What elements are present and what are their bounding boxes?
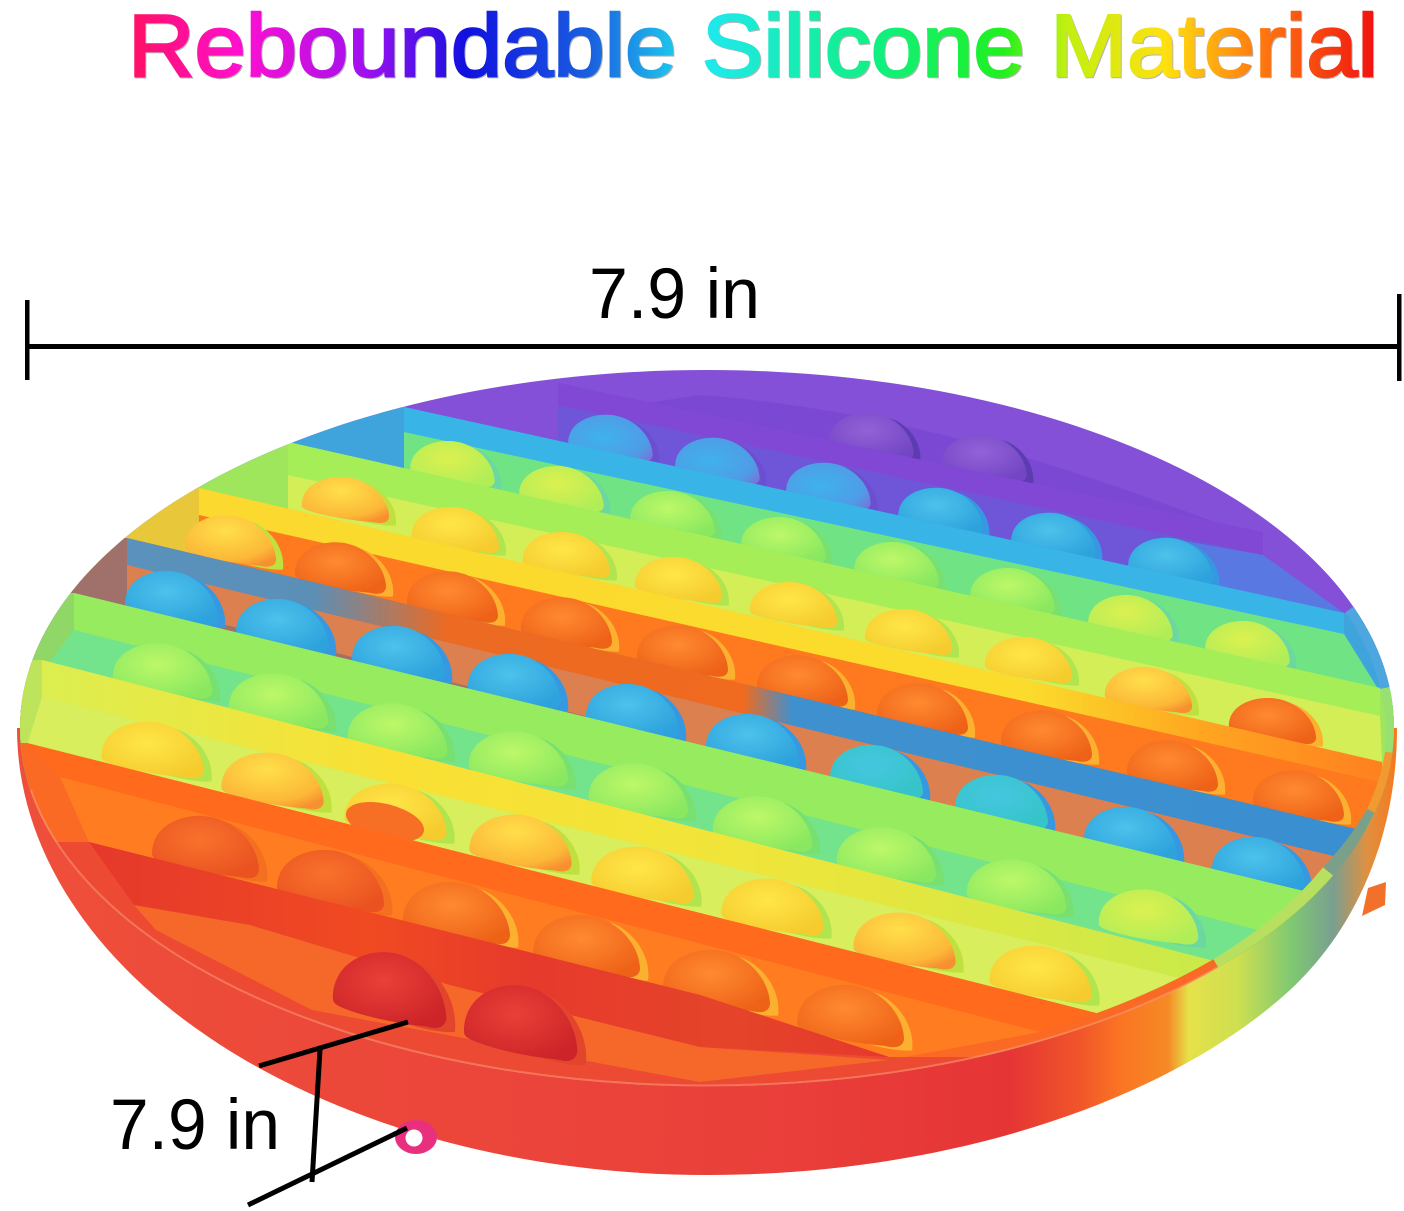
width label: 7.9 in [589, 255, 760, 334]
purple-blue row [558, 405, 1344, 613]
width dimension marker [25, 255, 1402, 381]
red section [56, 842, 978, 1086]
purple wall [558, 383, 1263, 555]
blue wall section [20, 538, 1366, 966]
blue section [20, 407, 1394, 966]
green section [20, 442, 1394, 842]
orange section [20, 743, 1122, 1086]
right rim tab [1362, 882, 1386, 916]
outer side rim [17, 728, 1397, 1175]
yellow and orange section [20, 488, 1391, 955]
green lower section [20, 593, 1316, 962]
height dimension marker [110, 1022, 408, 1205]
height label: 7.9 in [110, 1086, 280, 1165]
rim highlight [31, 790, 1218, 1085]
top face [20, 370, 1395, 1100]
rim segments on the top face [1096, 607, 1395, 1023]
hanging loop [395, 1120, 437, 1154]
yellow lower section [20, 660, 1226, 1013]
purple top row [652, 395, 1209, 520]
pop-it toy disc [17, 370, 1397, 1175]
